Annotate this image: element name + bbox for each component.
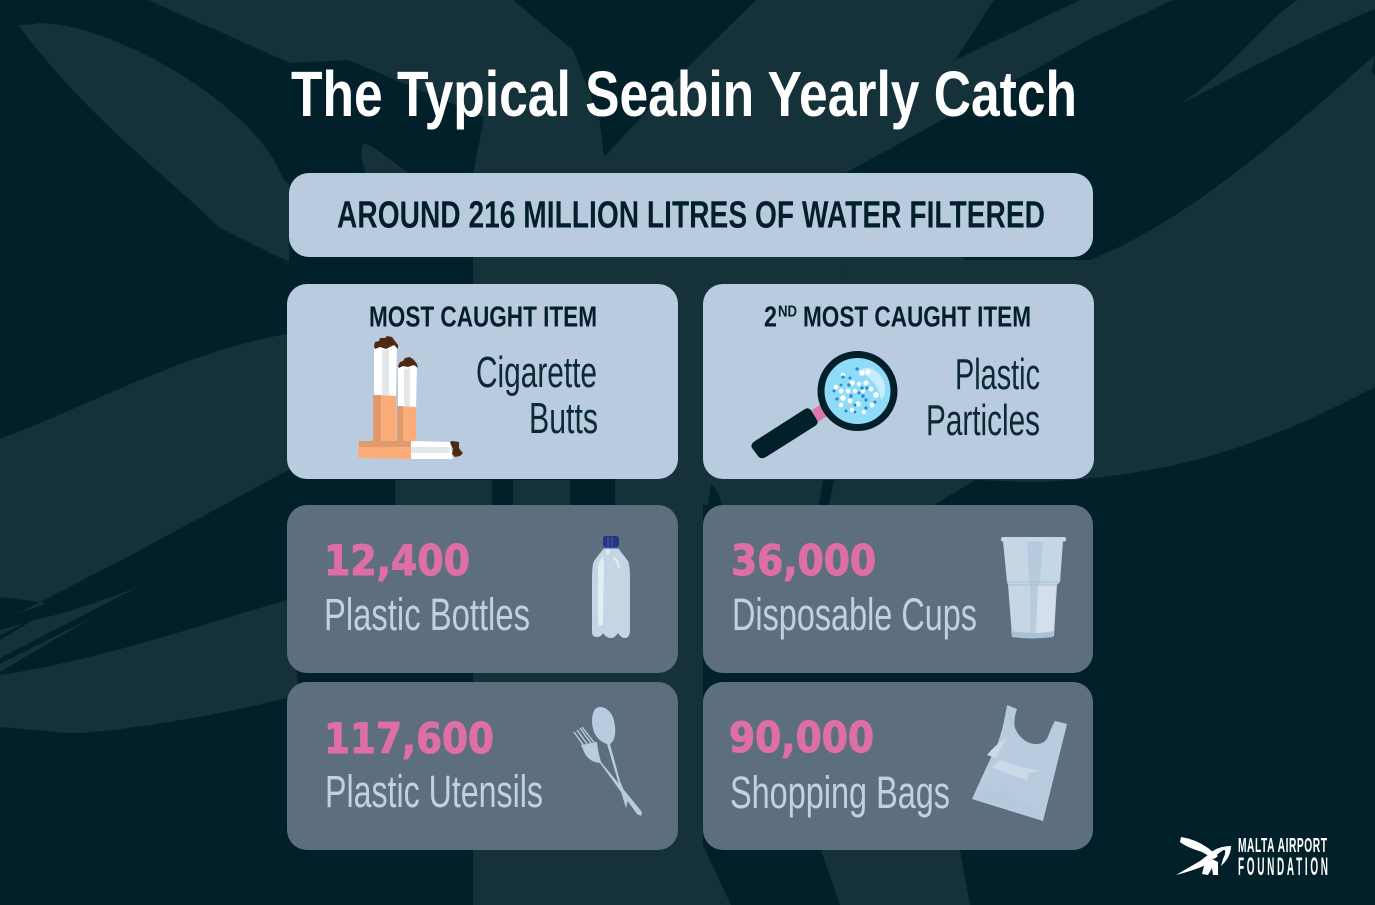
icon: plastic bottle (592, 536, 630, 638)
panel: plastic bottles (287, 505, 678, 673)
label: cigarette butts (476, 348, 598, 443)
heading: most caught item: MOST CAUGHT ITEM (369, 302, 597, 334)
label: plastic particles: Particles (926, 396, 1040, 445)
panel: second most caught item (703, 284, 1094, 479)
number: 117,600: 117,600 (324, 714, 494, 763)
heading: second most caught item (764, 302, 1031, 334)
logo text: MALTA AIRPORT (1238, 834, 1327, 857)
title: The Typical Seabin Yearly Catch (291, 58, 1077, 130)
panel: most caught item (287, 284, 678, 479)
heading: second most caught item: MOST CAUGHT ITEM (803, 302, 1031, 334)
label: plastic particles (926, 350, 1040, 445)
icon: magnifying glass with plastic particles (751, 354, 894, 458)
icon: plastic cup (1001, 537, 1066, 638)
label: plastic bottles: Plastic Bottles (324, 589, 530, 640)
label: plastic particles: Plastic (955, 350, 1040, 399)
logo text (1238, 834, 1328, 882)
label: cigarette butts: Cigarette (476, 348, 597, 397)
icon: fork and spoon (574, 707, 642, 816)
label: disposable cups: Disposable Cups (732, 589, 977, 640)
panel: disposable cups (703, 505, 1093, 673)
icon: plastic bag (972, 705, 1067, 821)
panel: shopping bags (703, 682, 1093, 850)
panel: plastic utensils (287, 682, 678, 850)
logo text: FOUNDATION (1238, 854, 1328, 882)
number: 36,000: 36,000 (731, 536, 876, 585)
label: shopping bags: Shopping Bags (730, 767, 950, 818)
label: cigarette butts: Butts (529, 394, 598, 443)
label: plastic utensils: Plastic Utensils (325, 766, 543, 817)
heading: second most caught item: ND (778, 304, 797, 320)
icon: cigarette butts (358, 336, 463, 459)
number: 12,400: 12,400 (324, 536, 470, 585)
panel: litres filtered banner (289, 173, 1093, 257)
icon: aircraft mark (1176, 837, 1232, 875)
banner text: AROUND 216 MILLION LITRES OF WATER FILTERED (337, 194, 1045, 236)
logo: Malta Airport Foundation (1176, 834, 1328, 882)
number: 90,000: 90,000 (729, 713, 874, 762)
heading: second most caught item: 2 (764, 302, 777, 334)
